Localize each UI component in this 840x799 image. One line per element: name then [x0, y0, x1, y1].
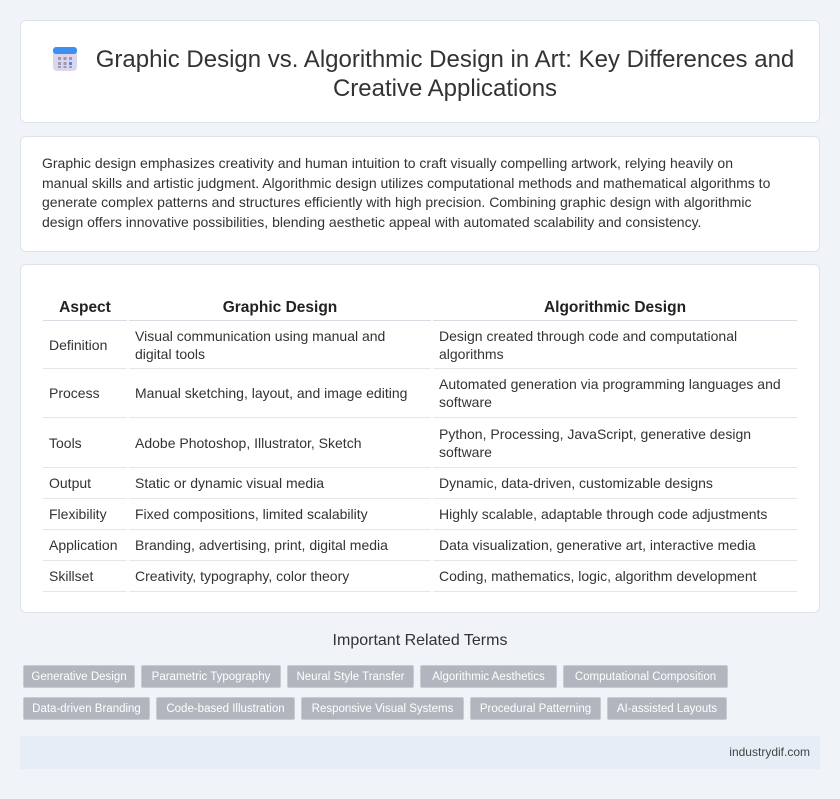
comparison table: Python, Processing, JavaScript, generative design software	[439, 426, 751, 460]
icon: calendar	[53, 47, 77, 71]
comparison table: Process	[49, 385, 100, 401]
related terms tags: Data-driven Branding	[32, 703, 141, 715]
title: Graphic Design vs. Algorithmic Design in Art: Key Differences and Creative Applications	[96, 46, 794, 102]
comparison table: Aspect	[59, 299, 111, 316]
comparison table: Output	[49, 475, 91, 491]
comparison table: Fixed compositions, limited scalability	[135, 506, 368, 522]
comparison table: Data visualization, generative art, interactive media	[439, 537, 756, 553]
related terms tags: Algorithmic Aesthetics	[432, 671, 545, 683]
comparison table: Tools	[49, 434, 82, 450]
related terms tags: Procedural Patterning	[480, 703, 591, 715]
comparison table: Creativity, typography, color theory	[135, 568, 349, 584]
comparison table: Algorithmic Design	[544, 299, 686, 316]
comparison table: Branding, advertising, print, digital media	[135, 537, 388, 553]
comparison table: Design created through code and computational algorithms	[439, 328, 737, 362]
comparison table: Dynamic, data-driven, customizable designs	[439, 475, 713, 491]
related terms tags: Generative Design	[31, 671, 127, 683]
comparison table card	[20, 264, 820, 613]
related terms tags: Parametric Typography	[152, 671, 270, 683]
comparison table: Definition	[49, 336, 107, 352]
related terms heading: Important Related Terms	[333, 632, 507, 649]
related terms tags: Computational Composition	[575, 671, 716, 683]
comparison table: Static or dynamic visual media	[135, 475, 324, 491]
related terms tags: Responsive Visual Systems	[312, 703, 453, 715]
comparison table: Skillset	[49, 568, 93, 584]
intro text card	[20, 136, 820, 252]
comparison table: Adobe Photoshop, Illustrator, Sketch	[135, 434, 361, 450]
intro text card: Graphic design emphasizes creativity and human intuition to craft visually compelling artwork, relying heavily on manual skills and artistic judgment. Algorithmic design utilizes computational methods and mathematical algorithms to generate complex patterns and structures efficiently with high precision. Combining graphic design with algorithmic design offers innovative possibilities, blending aesthetic appeal with automated scalability and consistency.	[42, 155, 770, 230]
comparison table: Graphic Design	[223, 299, 337, 316]
comparison table: Manual sketching, layout, and image editing	[135, 385, 407, 401]
related terms tags: Neural Style Transfer	[296, 671, 404, 683]
comparison table: Automated generation via programming languages and software	[439, 376, 781, 410]
comparison table: Application	[49, 537, 118, 553]
footer	[20, 736, 820, 769]
comparison table: Flexibility	[49, 506, 107, 522]
header card	[20, 20, 820, 123]
related terms tags: AI-assisted Layouts	[617, 703, 717, 715]
comparison table	[43, 299, 797, 592]
comparison table: Highly scalable, adaptable through code adjustments	[439, 506, 767, 522]
comparison table: Coding, mathematics, logic, algorithm development	[439, 568, 756, 584]
comparison table: Visual communication using manual and digital tools	[135, 328, 385, 362]
related terms tags: Code-based Illustration	[166, 703, 285, 715]
footer: industrydif.com	[729, 745, 810, 759]
